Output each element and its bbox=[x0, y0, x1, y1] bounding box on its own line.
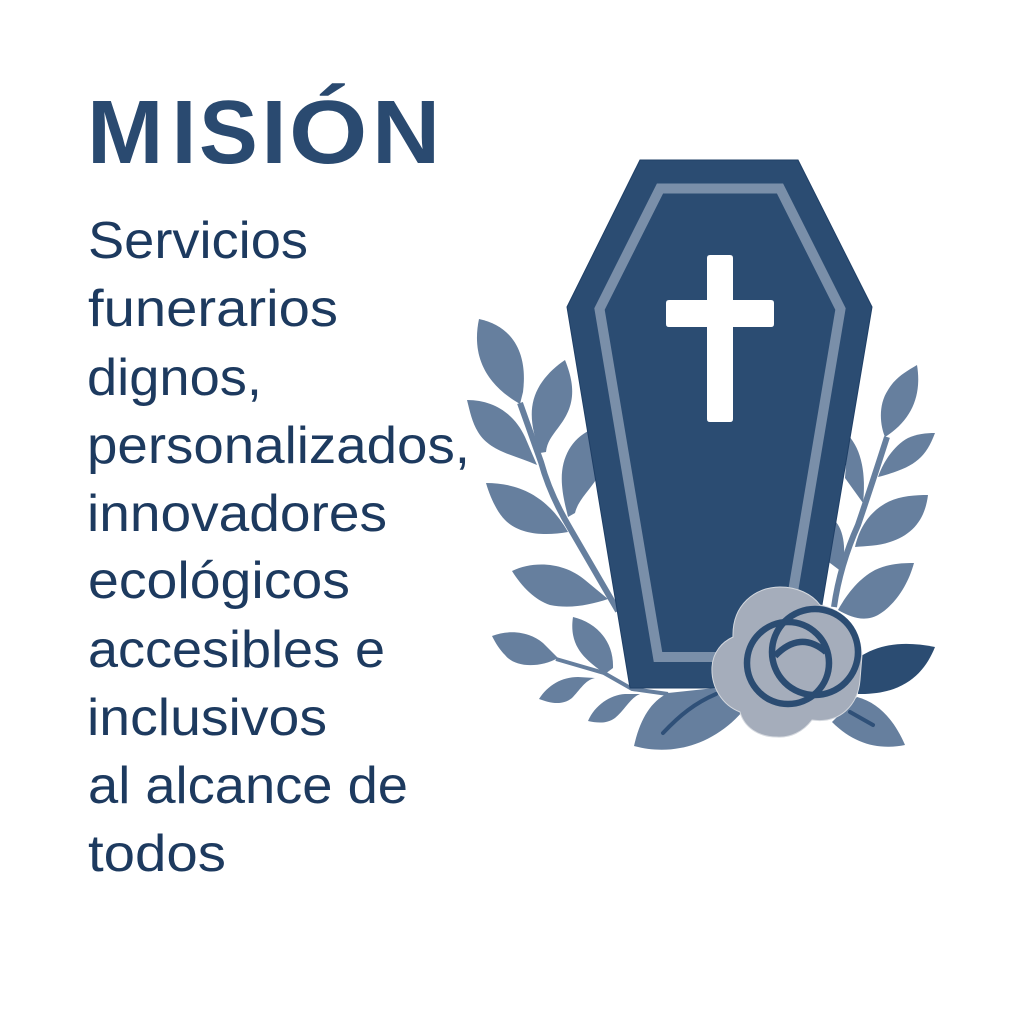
body text: mission statement: funerarios bbox=[88, 280, 338, 338]
body text: mission statement: accesibles e bbox=[88, 621, 385, 679]
body text: mission statement: ecológicos bbox=[88, 552, 350, 610]
body text: mission statement: inclusivos bbox=[87, 689, 327, 747]
body text: mission statement: al alcance de bbox=[88, 757, 408, 815]
icon: white cross bbox=[666, 255, 774, 422]
left laurel branch bbox=[467, 319, 668, 723]
right laurel branch bbox=[826, 365, 935, 619]
title bbox=[87, 81, 440, 183]
rose bbox=[712, 587, 862, 737]
coffin body bbox=[567, 160, 872, 688]
body text: mission statement: dignos, bbox=[87, 349, 262, 407]
illustration: coffin with leaves and rose bbox=[467, 160, 935, 750]
body text: mission statement: personalizados, bbox=[87, 417, 470, 475]
title: I bbox=[262, 83, 287, 183]
body text: mission statement: todos bbox=[88, 825, 226, 883]
bottom left leaf bbox=[634, 688, 742, 750]
body text: mission statement: innovadores bbox=[87, 485, 387, 543]
dark leaf bbox=[858, 644, 935, 694]
title: S bbox=[199, 81, 258, 182]
coffin inner outline bbox=[600, 188, 840, 657]
body text: mission statement bbox=[87, 212, 470, 883]
title: N bbox=[372, 81, 440, 183]
title: M bbox=[87, 83, 163, 183]
title: I bbox=[172, 83, 197, 183]
title: Ó bbox=[289, 82, 367, 183]
bottom right leaf bbox=[832, 697, 905, 747]
body text: mission statement: Servicios bbox=[88, 212, 308, 270]
